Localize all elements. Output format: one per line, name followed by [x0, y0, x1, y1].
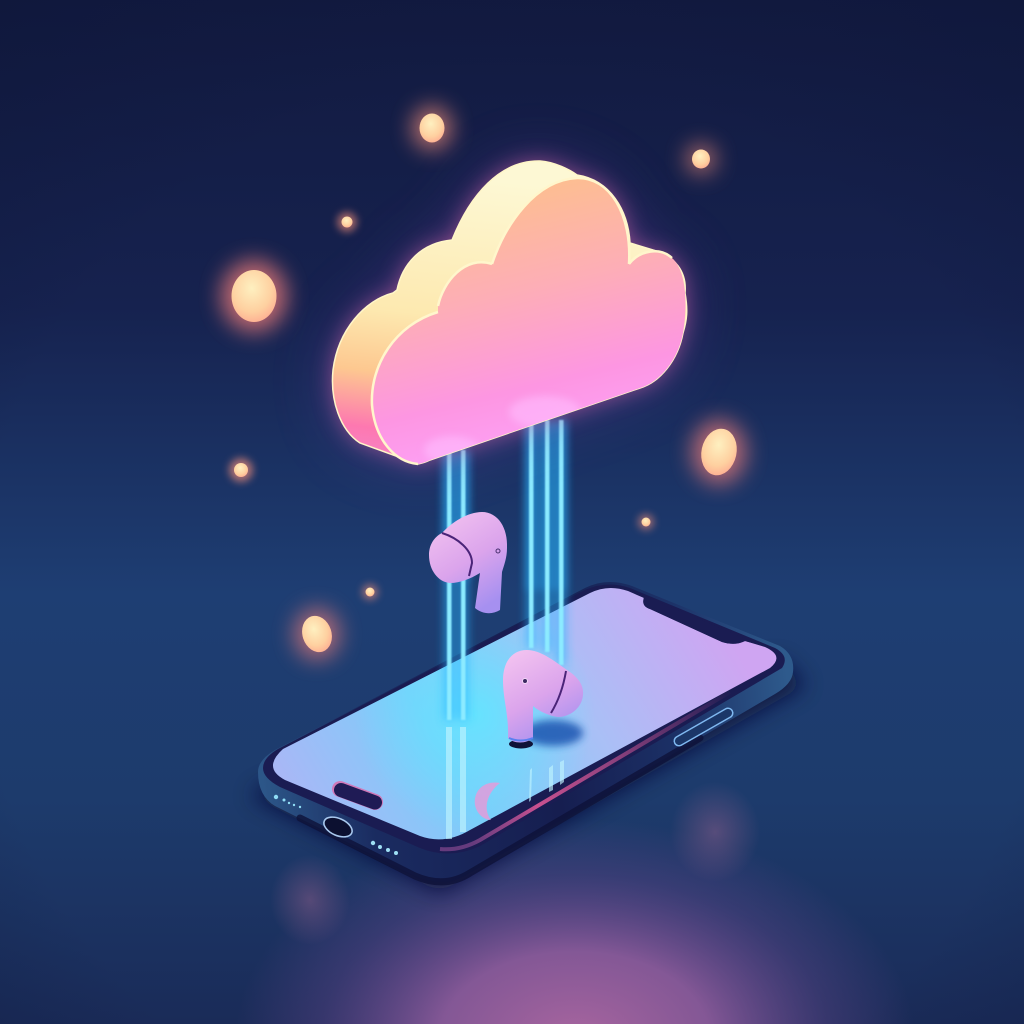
orb 3 [337, 212, 357, 232]
beam core left [447, 450, 466, 720]
earbud reflection [475, 782, 500, 820]
earbud hole [522, 678, 528, 684]
phone [250, 582, 805, 892]
cloud rim highlight [372, 178, 672, 464]
earbud hole [496, 549, 500, 553]
phone screen [273, 588, 776, 839]
orb 5 [229, 458, 253, 482]
orb 9 [294, 608, 340, 660]
orb 8 [362, 584, 378, 600]
speaker dots right [371, 841, 398, 855]
cloud front [372, 178, 686, 464]
glowing orbs [221, 106, 746, 660]
phone underside shade [300, 738, 700, 882]
earbud shell [429, 512, 507, 613]
light beams [442, 420, 567, 839]
screen glow [273, 588, 776, 839]
orb 7 [638, 514, 654, 530]
phone bezel [263, 584, 785, 854]
cloud base glow [424, 396, 581, 464]
earbud seam [442, 533, 472, 576]
notch [640, 594, 760, 645]
beam haze [442, 420, 567, 590]
camera cutout [340, 789, 375, 802]
phone shadow [250, 660, 805, 892]
earbud shadow [523, 720, 583, 746]
pink edge reflection [440, 692, 730, 849]
cloud glow [332, 161, 687, 464]
beam core right [529, 420, 564, 665]
beam reflection [446, 727, 564, 839]
earbud shell [503, 650, 583, 742]
charging port [321, 813, 355, 841]
orb 4 [221, 260, 287, 332]
speaker dots left [274, 795, 301, 808]
beam glow [445, 420, 565, 720]
orb 6 [692, 420, 746, 484]
earbud seam [551, 671, 566, 713]
cloud wide glow [332, 161, 687, 464]
earbud base [509, 740, 533, 748]
phone body [258, 582, 793, 882]
orb 2 [686, 144, 716, 174]
side button [679, 713, 728, 741]
cloud side [332, 161, 687, 464]
earbud tip ring [509, 738, 533, 740]
cloud [332, 161, 687, 464]
floating earbud [429, 512, 507, 613]
orb 1 [412, 106, 452, 150]
earbud on screen [503, 650, 583, 748]
